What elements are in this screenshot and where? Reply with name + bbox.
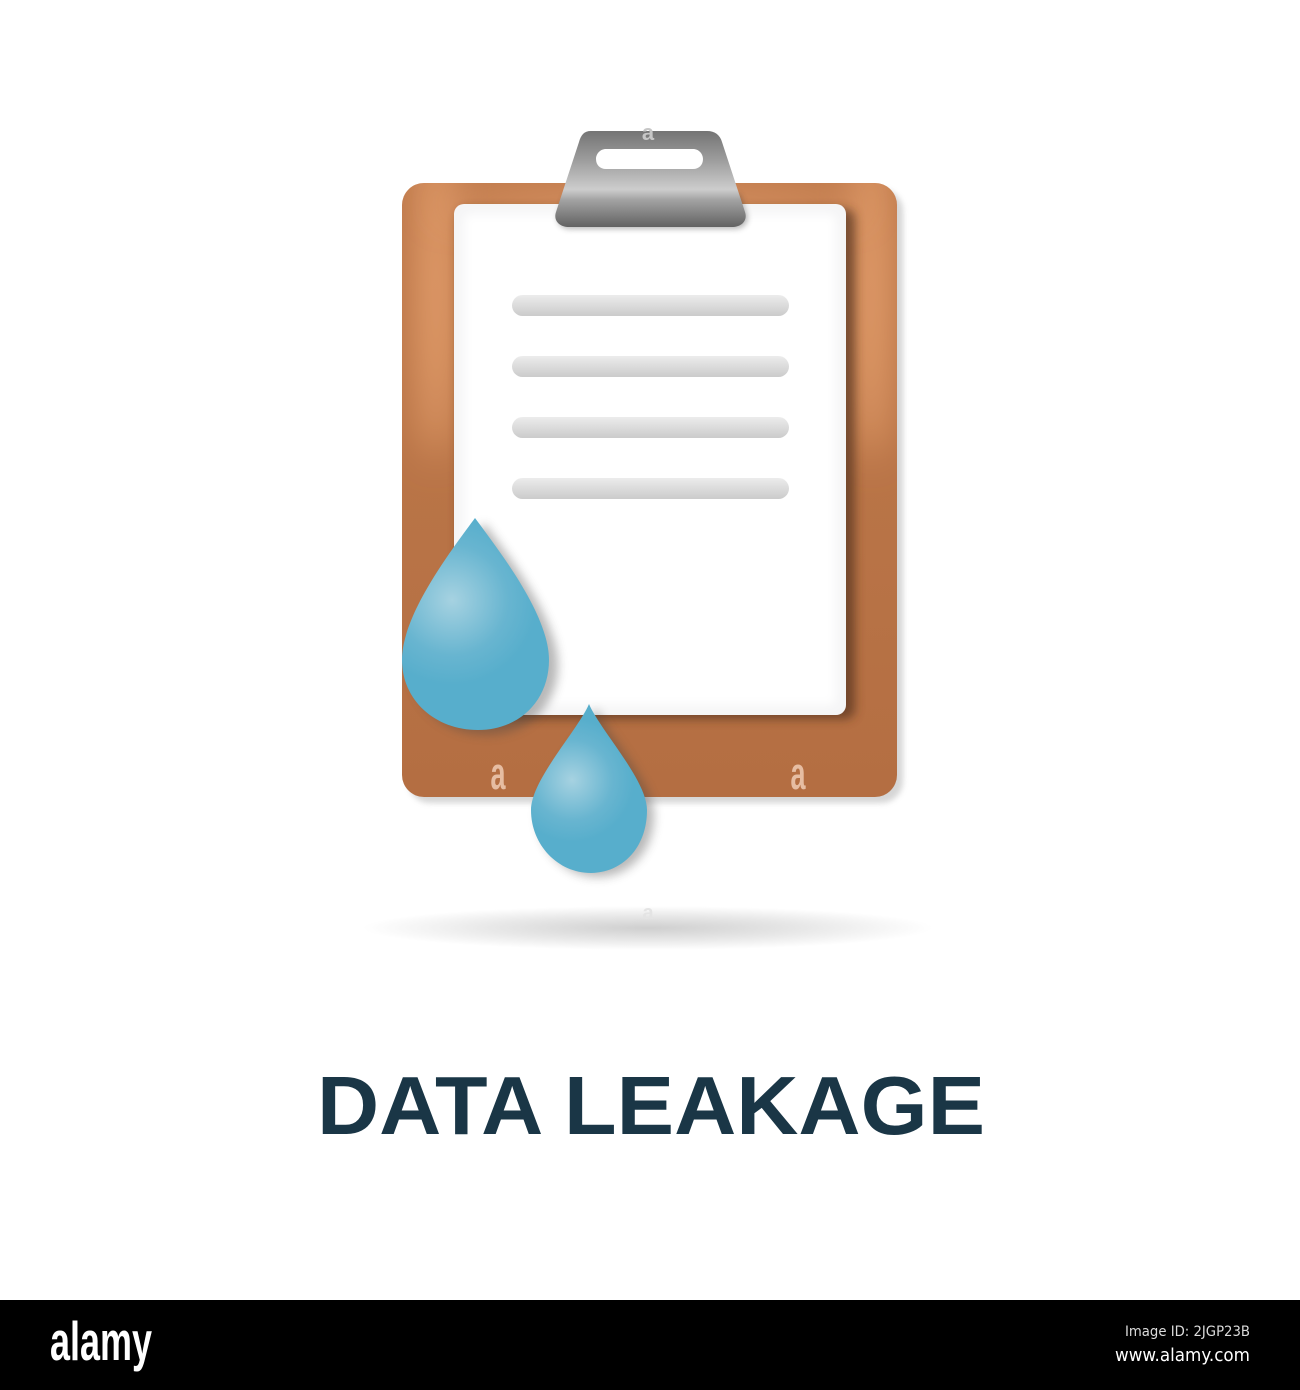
title: DATA LEAKAGE (317, 1059, 985, 1152)
watermark glyphs: a (642, 120, 655, 145)
paper sheet (454, 204, 855, 719)
footer bar (0, 1300, 1300, 1390)
website: www.alamy.com (1115, 1345, 1250, 1366)
metal clip (555, 131, 748, 229)
text line 2 (512, 356, 789, 377)
text line 1 (512, 295, 789, 316)
icon: small water drop (531, 704, 654, 877)
text line 3 (512, 417, 789, 438)
footer logo: alamy (50, 1310, 152, 1372)
icon: large water drop (402, 518, 558, 735)
watermark glyphs (490, 120, 806, 924)
clipboard board (402, 130, 903, 803)
icon: clipboard (402, 130, 903, 803)
image id: Image ID: 2JGP23B (1125, 1324, 1250, 1340)
ground shadow (363, 906, 933, 950)
text line 4 (512, 478, 789, 499)
watermark glyphs: a (642, 902, 654, 924)
watermark glyphs: a (490, 748, 506, 799)
watermark glyphs: a (790, 748, 806, 799)
